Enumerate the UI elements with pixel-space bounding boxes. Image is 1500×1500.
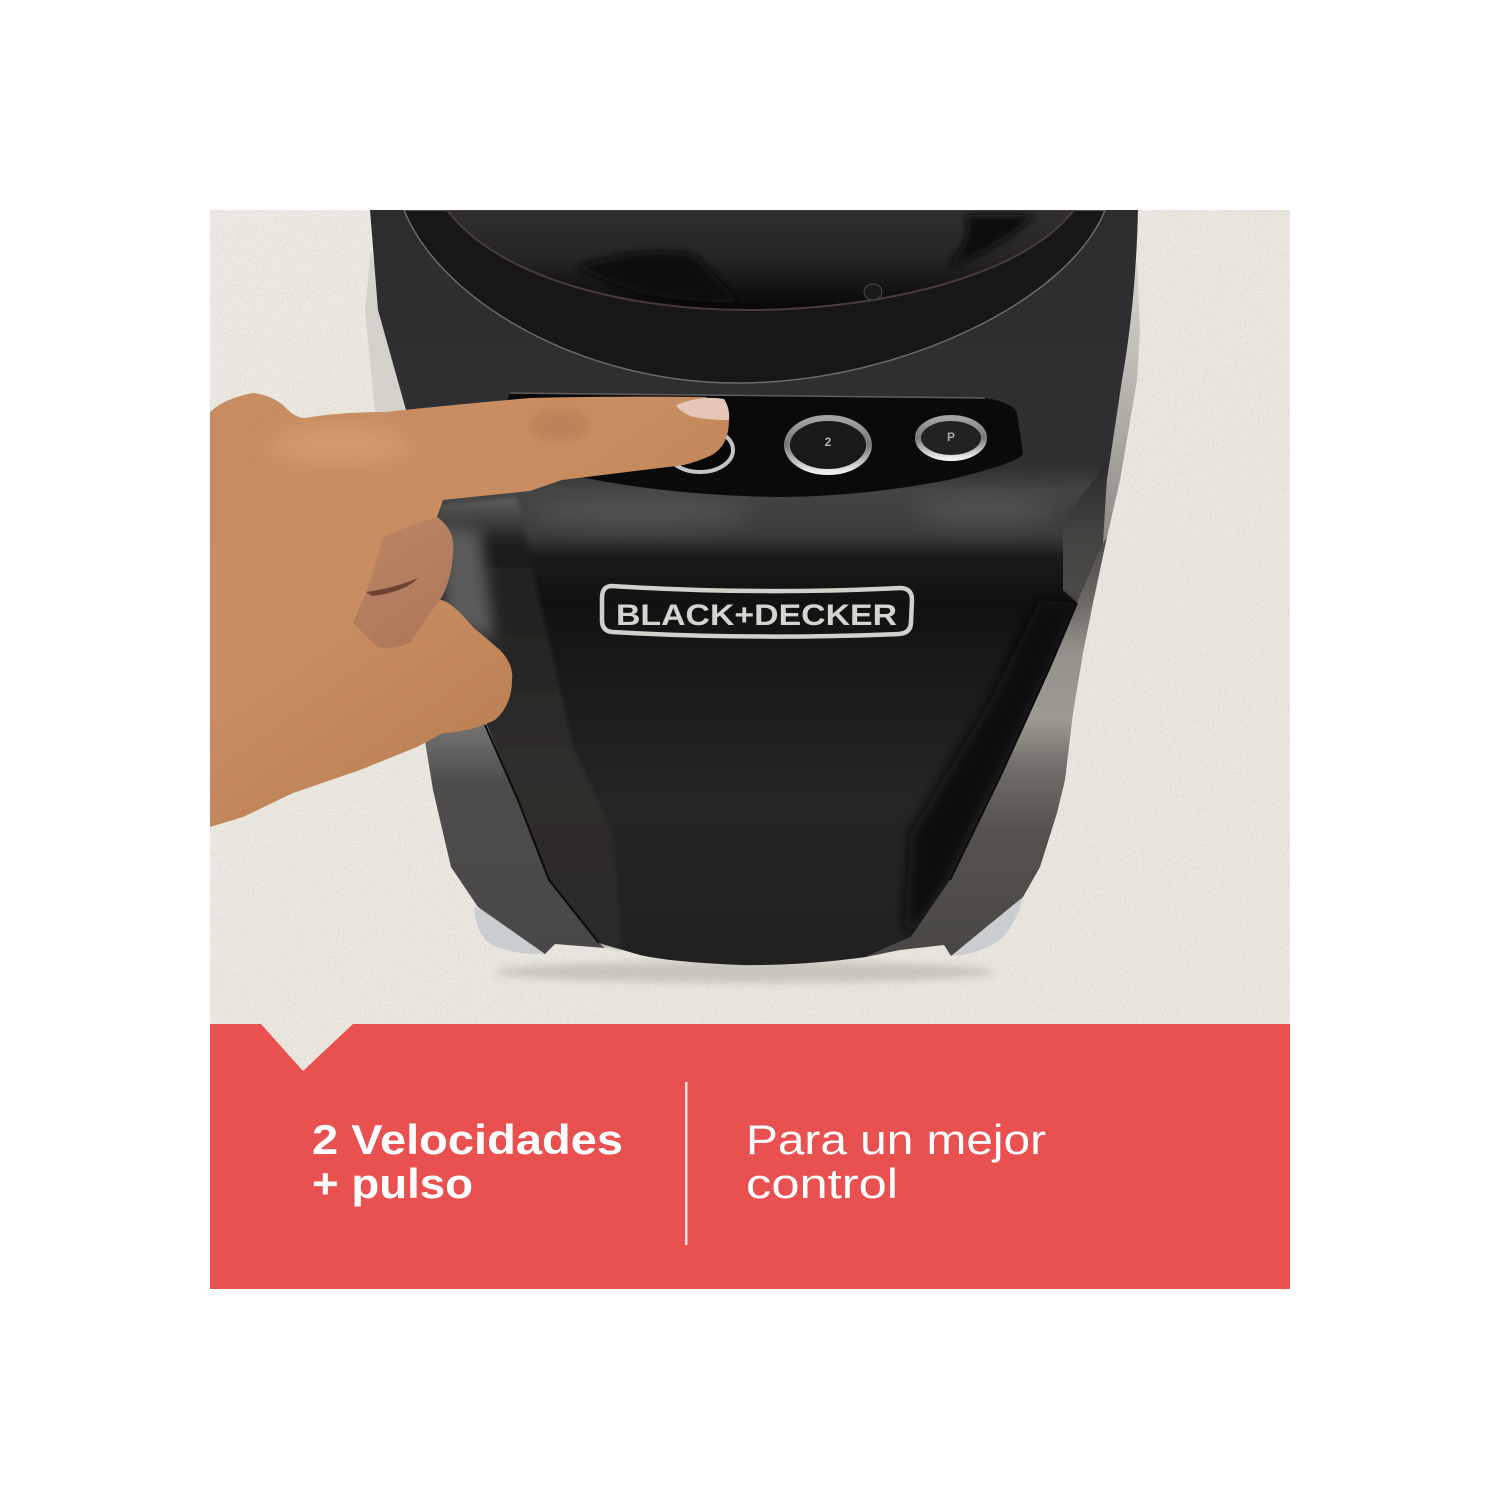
red band with notch	[210, 1024, 1290, 1289]
hand pressing button	[210, 393, 729, 827]
shoulder sheen left	[544, 498, 736, 529]
brand logo: BLACK+DECKER	[616, 599, 897, 632]
fingernail	[676, 398, 729, 420]
front-left strip	[440, 497, 622, 948]
heading: 2 Velocidades + pulso: + pulso	[312, 1160, 473, 1207]
glass jar	[447, 210, 1074, 310]
button pulse: P	[947, 430, 955, 444]
seam lines	[485, 603, 1077, 943]
blender feet	[474, 897, 1023, 956]
jar collar	[404, 210, 1105, 383]
heading: 2 Velocidades + pulso: 2 Velocidades	[312, 1116, 623, 1163]
lower left side panel	[424, 720, 605, 954]
button 1	[674, 434, 735, 474]
pale side trim of blender	[365, 250, 1140, 543]
curled middle finger	[353, 517, 453, 648]
countertop	[210, 210, 1290, 1080]
hand silhouette	[210, 393, 729, 827]
product photo: blender on countertop	[210, 210, 1290, 1080]
gray area between fingers	[440, 525, 495, 640]
upper right facet	[1063, 463, 1107, 603]
button 2	[787, 418, 869, 472]
front-right dark strip	[905, 600, 1077, 937]
knuckle highlight	[282, 429, 398, 461]
description: Para un mejor control: control	[746, 1160, 898, 1207]
description: Para un mejor control: Para un mejor	[746, 1116, 1046, 1163]
shoulder sheen right	[927, 496, 1044, 526]
blender motor body	[370, 210, 1138, 965]
divider	[685, 1082, 688, 1245]
caption band	[210, 1024, 1290, 1289]
finger shading	[534, 412, 586, 438]
button 2: 2	[825, 435, 832, 449]
control panel	[500, 393, 1023, 497]
button pulse	[918, 418, 984, 458]
brand logo	[602, 586, 912, 637]
soft shadow under blender	[495, 961, 995, 983]
finger crease	[366, 578, 418, 596]
lower right side panel	[866, 537, 1107, 957]
